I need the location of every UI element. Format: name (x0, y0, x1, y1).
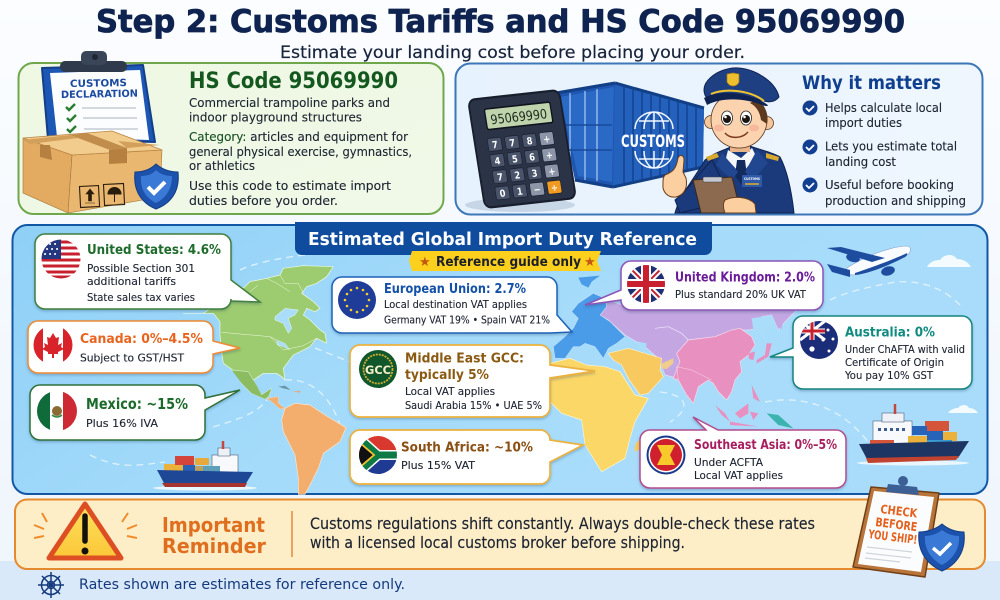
callout: Southeast Asia: Under ACFTA (694, 457, 764, 469)
icon: calculator: 7 (497, 173, 504, 184)
badge: reference guide only (409, 251, 601, 271)
flag: Canada (34, 328, 72, 362)
list item: landing cost (802, 140, 957, 169)
heading: HS code: HS Code 95069990 (189, 69, 398, 94)
flag: United States (41, 239, 81, 279)
subtitle: Estimate your landing cost before placing your order. (280, 43, 745, 63)
icon: customs declaration clipboard: DECLARATION (61, 89, 138, 101)
flag: ASEAN (646, 436, 686, 474)
badge: reference guide only: ★ (419, 255, 431, 270)
icon: calculator: 6 (529, 153, 536, 164)
callout: South Africa: South Africa: ~10% (401, 440, 533, 456)
callout: Canada (28, 321, 240, 373)
text: description: duties before you order. (189, 193, 338, 208)
icon: calculator: 95069990 (489, 106, 548, 128)
callout: Mexico (30, 385, 240, 440)
callout: Middle East GCC: typically 5% (405, 367, 489, 383)
callout: United States: additional tariffs (87, 276, 176, 288)
flag: GCC: GCC (365, 363, 391, 377)
badge: reference guide only: Reference guide only (436, 255, 581, 270)
icon: check before you ship clipboard: CHECK (880, 502, 919, 521)
callout: European Union: Germany VAT 19% • Spain VAT 21% (384, 314, 550, 326)
callout: Australia (770, 316, 972, 389)
icon: calculator: 4 (494, 156, 501, 168)
icon: calculator: − (533, 185, 542, 196)
icon: shield with check (135, 164, 178, 209)
icon: globe emblem (635, 112, 673, 168)
flag: GCC (359, 350, 397, 388)
text: reminder message: with a licensed local customs broker before shipping. (310, 533, 685, 552)
callout: Mexico: Mexico: ~15% (86, 395, 188, 413)
callout: Southeast Asia (640, 417, 846, 488)
list item: local import duties (802, 100, 942, 130)
callout: European Union (332, 277, 572, 333)
callout: Southeast Asia: Local VAT applies (694, 470, 783, 482)
officer head (704, 92, 774, 152)
callout: South Africa: Plus 15% VAT (401, 460, 476, 472)
North and South America (183, 266, 346, 494)
callout: Middle East GCC: Saudi Arabia 15% • UAE 5% (405, 400, 542, 412)
icon: clouds (927, 255, 978, 413)
callout: United Kingdom (585, 261, 823, 310)
heading: important reminder (162, 513, 266, 558)
list item: local import duties: import duties (825, 116, 902, 130)
text: reminder message (310, 514, 815, 552)
callout: European Union: Local destination VAT applies (384, 299, 527, 311)
text: description: Commercial trampoline parks and (189, 95, 390, 110)
panel: global import duty map (12, 222, 988, 494)
heading tab (295, 222, 712, 255)
text: description: indoor playground structures (189, 110, 362, 124)
footer note (38, 572, 405, 598)
callout: Australia: Under ChAFTA with valid (845, 344, 965, 356)
icon: calculator: 1 (516, 187, 524, 198)
callout: United Kingdom: United Kingdom: 2.0% (675, 270, 815, 286)
icon: customs declaration clipboard: CUSTOMS (70, 78, 127, 90)
icon: calculator: ÷ (550, 183, 559, 195)
icon: cargo ship right (857, 404, 969, 466)
icon: check before you ship clipboard: BEFORE (875, 515, 918, 534)
icon: cargo ship left (153, 441, 257, 490)
heading tab: Estimated Global Import Duty Reference (308, 229, 697, 250)
callout: United States: United States: 4.6% (87, 242, 221, 258)
clipboard held by officer (693, 177, 756, 213)
icon: calculator: 8 (526, 136, 533, 148)
icon: calculator: 5 (511, 155, 519, 166)
badge: reference guide only: ★ (584, 255, 596, 270)
callout: United States: State sales tax varies (87, 292, 195, 304)
icon: calculator: + (545, 151, 554, 162)
list item: local import duties: Helps calculate local (825, 101, 942, 115)
text: description: general physical exercise, gymnastics, (189, 144, 412, 159)
icon: calculator: + (548, 167, 556, 178)
callout: United States: Possible Section 301 (87, 263, 195, 275)
text: description: Category: articles and equipment for (189, 129, 409, 144)
callout: Southeast Asia: Southeast Asia: 0%–5% (694, 437, 837, 453)
panel: important reminder (15, 476, 985, 577)
officer thumbs-up arm (663, 156, 722, 213)
panel: why it matters (456, 64, 982, 214)
flag: United Kingdom (627, 265, 665, 303)
callout: Australia: Australia: 0% (845, 325, 935, 341)
icon: customs officer (663, 68, 794, 213)
callout: Middle East GCC: Middle East GCC: (405, 351, 524, 367)
icon: warning triangle (34, 504, 137, 558)
title: Step 2: Customs Tariffs and HS Code 95069990 (96, 4, 905, 40)
list item: before booking: production and shipping (825, 194, 966, 208)
list item: before booking: Useful before booking (825, 178, 954, 192)
world map (90, 254, 960, 494)
icon: customs officer: CUSTOMS (744, 177, 760, 181)
icon: ship helm (38, 572, 64, 598)
callout: Middle East GCC: Local VAT applies (405, 386, 495, 398)
callout: United States (35, 234, 260, 309)
callout: European Union: European Union: 2.7% (384, 281, 526, 297)
icon: calculator (465, 90, 576, 212)
icon: shipping container (556, 83, 704, 187)
icon: airplane (827, 246, 910, 277)
text: description (189, 95, 412, 208)
callout: Mexico: Plus 16% IVA (86, 418, 159, 430)
text: reminder message: Customs regulations shift constantly. Always double-check these rates (310, 514, 815, 533)
icon: customs declaration clipboard (42, 51, 155, 142)
flag: European Union (338, 281, 376, 319)
panel: HS code (18, 51, 444, 214)
callout: South Africa (350, 430, 583, 484)
text: description: or athletics (189, 158, 255, 173)
heading: important reminder: Reminder (162, 534, 266, 558)
list item: landing cost: Lets you estimate total (825, 140, 957, 154)
footer note: Rates shown are estimates for reference only. (79, 577, 405, 593)
callout: Australia: Certificate of Origin (845, 357, 944, 369)
icon: check before you ship clipboard: YOU SHIP! (867, 527, 918, 547)
icon: calculator: 0 (499, 189, 506, 200)
heading: important reminder: Important (162, 513, 265, 537)
icon: cardboard box (23, 131, 162, 213)
flag: Mexico (37, 391, 77, 431)
icon: calculator: + (543, 134, 551, 146)
officer cap (704, 68, 779, 106)
icon: calculator: 7 (491, 140, 499, 152)
Europe Africa Asia (550, 276, 798, 472)
callout: United Kingdom: Plus standard 20% UK VAT (675, 289, 807, 301)
list item: before booking (802, 178, 966, 208)
icon: shipping container: CUSTOMS (621, 132, 685, 152)
icon: calculator: 2 (514, 171, 521, 182)
text: description: Use this code to estimate import (189, 178, 391, 193)
icon: calculator: 7 (509, 138, 516, 150)
callout: Middle East GCC (350, 345, 595, 417)
heading: why it matters: Why it matters (802, 72, 941, 94)
flag: Australia (800, 321, 838, 359)
icon: shield with check small (919, 524, 964, 571)
icon: check before you ship clipboard (853, 476, 939, 577)
flag: South Africa (359, 436, 397, 474)
icon: calculator: 3 (531, 169, 539, 180)
callout: Canada: Subject to GST/HST (80, 352, 185, 364)
callout: Canada: Canada: 0%–4.5% (80, 331, 203, 347)
callout: Australia: You pay 10% GST (844, 370, 934, 382)
list item: landing cost: landing cost (825, 155, 896, 169)
